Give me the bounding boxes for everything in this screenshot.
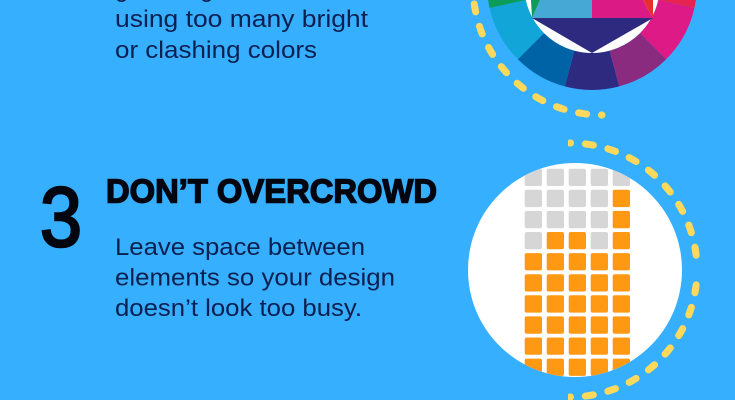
text block: overcrowd description: elements so your design [115,264,395,292]
text block: color tip continuation: or clashing colors [115,37,317,64]
number 3: 3 [40,170,82,264]
icon: white circle with block grid [468,163,682,377]
text block: overcrowd description: Leave space between [115,234,365,261]
text block: color tip continuation [115,0,368,64]
dashed arc around color wheel [473,0,602,115]
icon: color wheel [487,0,697,90]
text block: color tip continuation: using too many bright [115,6,368,33]
text block: overcrowd description [115,234,395,322]
heading: don't overcrowd: DON’T OVERCROWD [106,174,437,210]
dashed arc around block grid [570,143,697,397]
text block: overcrowd description: doesn’t look too busy. [115,295,362,322]
